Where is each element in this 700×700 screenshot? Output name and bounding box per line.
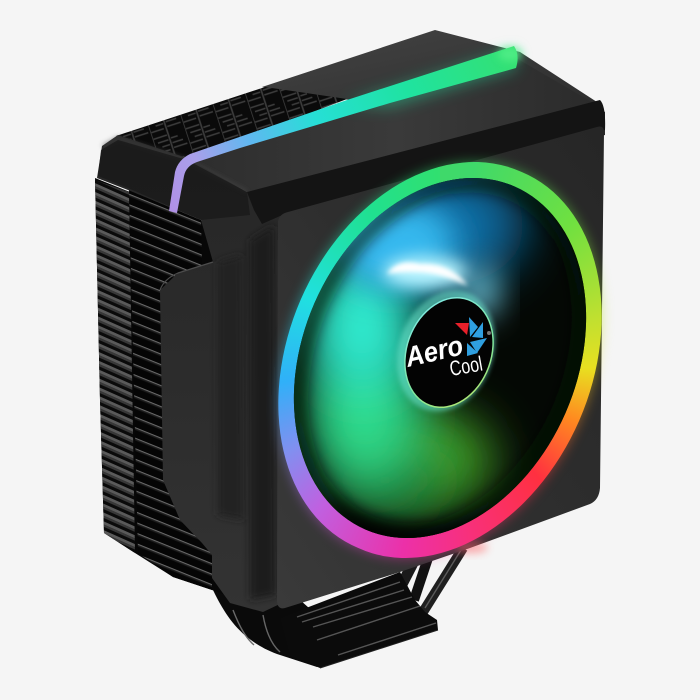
CPU base plate [280, 572, 438, 668]
fan frame face [277, 127, 604, 608]
RGB fan ring [278, 162, 602, 558]
heatpipes and lower bulge [212, 548, 463, 667]
fan blades and hub [294, 178, 586, 538]
mesh top [116, 87, 347, 160]
dark front band [247, 100, 605, 224]
rear top panel [262, 30, 600, 104]
side shroud [97, 135, 282, 612]
upper shoulder panel [187, 58, 605, 225]
fan impeller glow [294, 178, 586, 538]
red glow under ring [456, 542, 488, 554]
strip glow [345, 50, 516, 106]
strip end highlight [498, 47, 522, 61]
heatsink fins front [129, 190, 212, 590]
hub with logo [389, 284, 509, 421]
logo: Aero: Aero [401, 330, 466, 373]
hub halo [381, 277, 511, 425]
product image: CPU cooler [95, 30, 610, 668]
logo: pinwheel [455, 317, 491, 356]
logo: Cool: Cool [448, 353, 484, 381]
RGB light strip [169, 46, 518, 213]
heatsink fins rear [95, 180, 135, 553]
heatsink backing [95, 178, 240, 600]
side clip edge [160, 262, 213, 290]
ring glow [270, 154, 610, 566]
